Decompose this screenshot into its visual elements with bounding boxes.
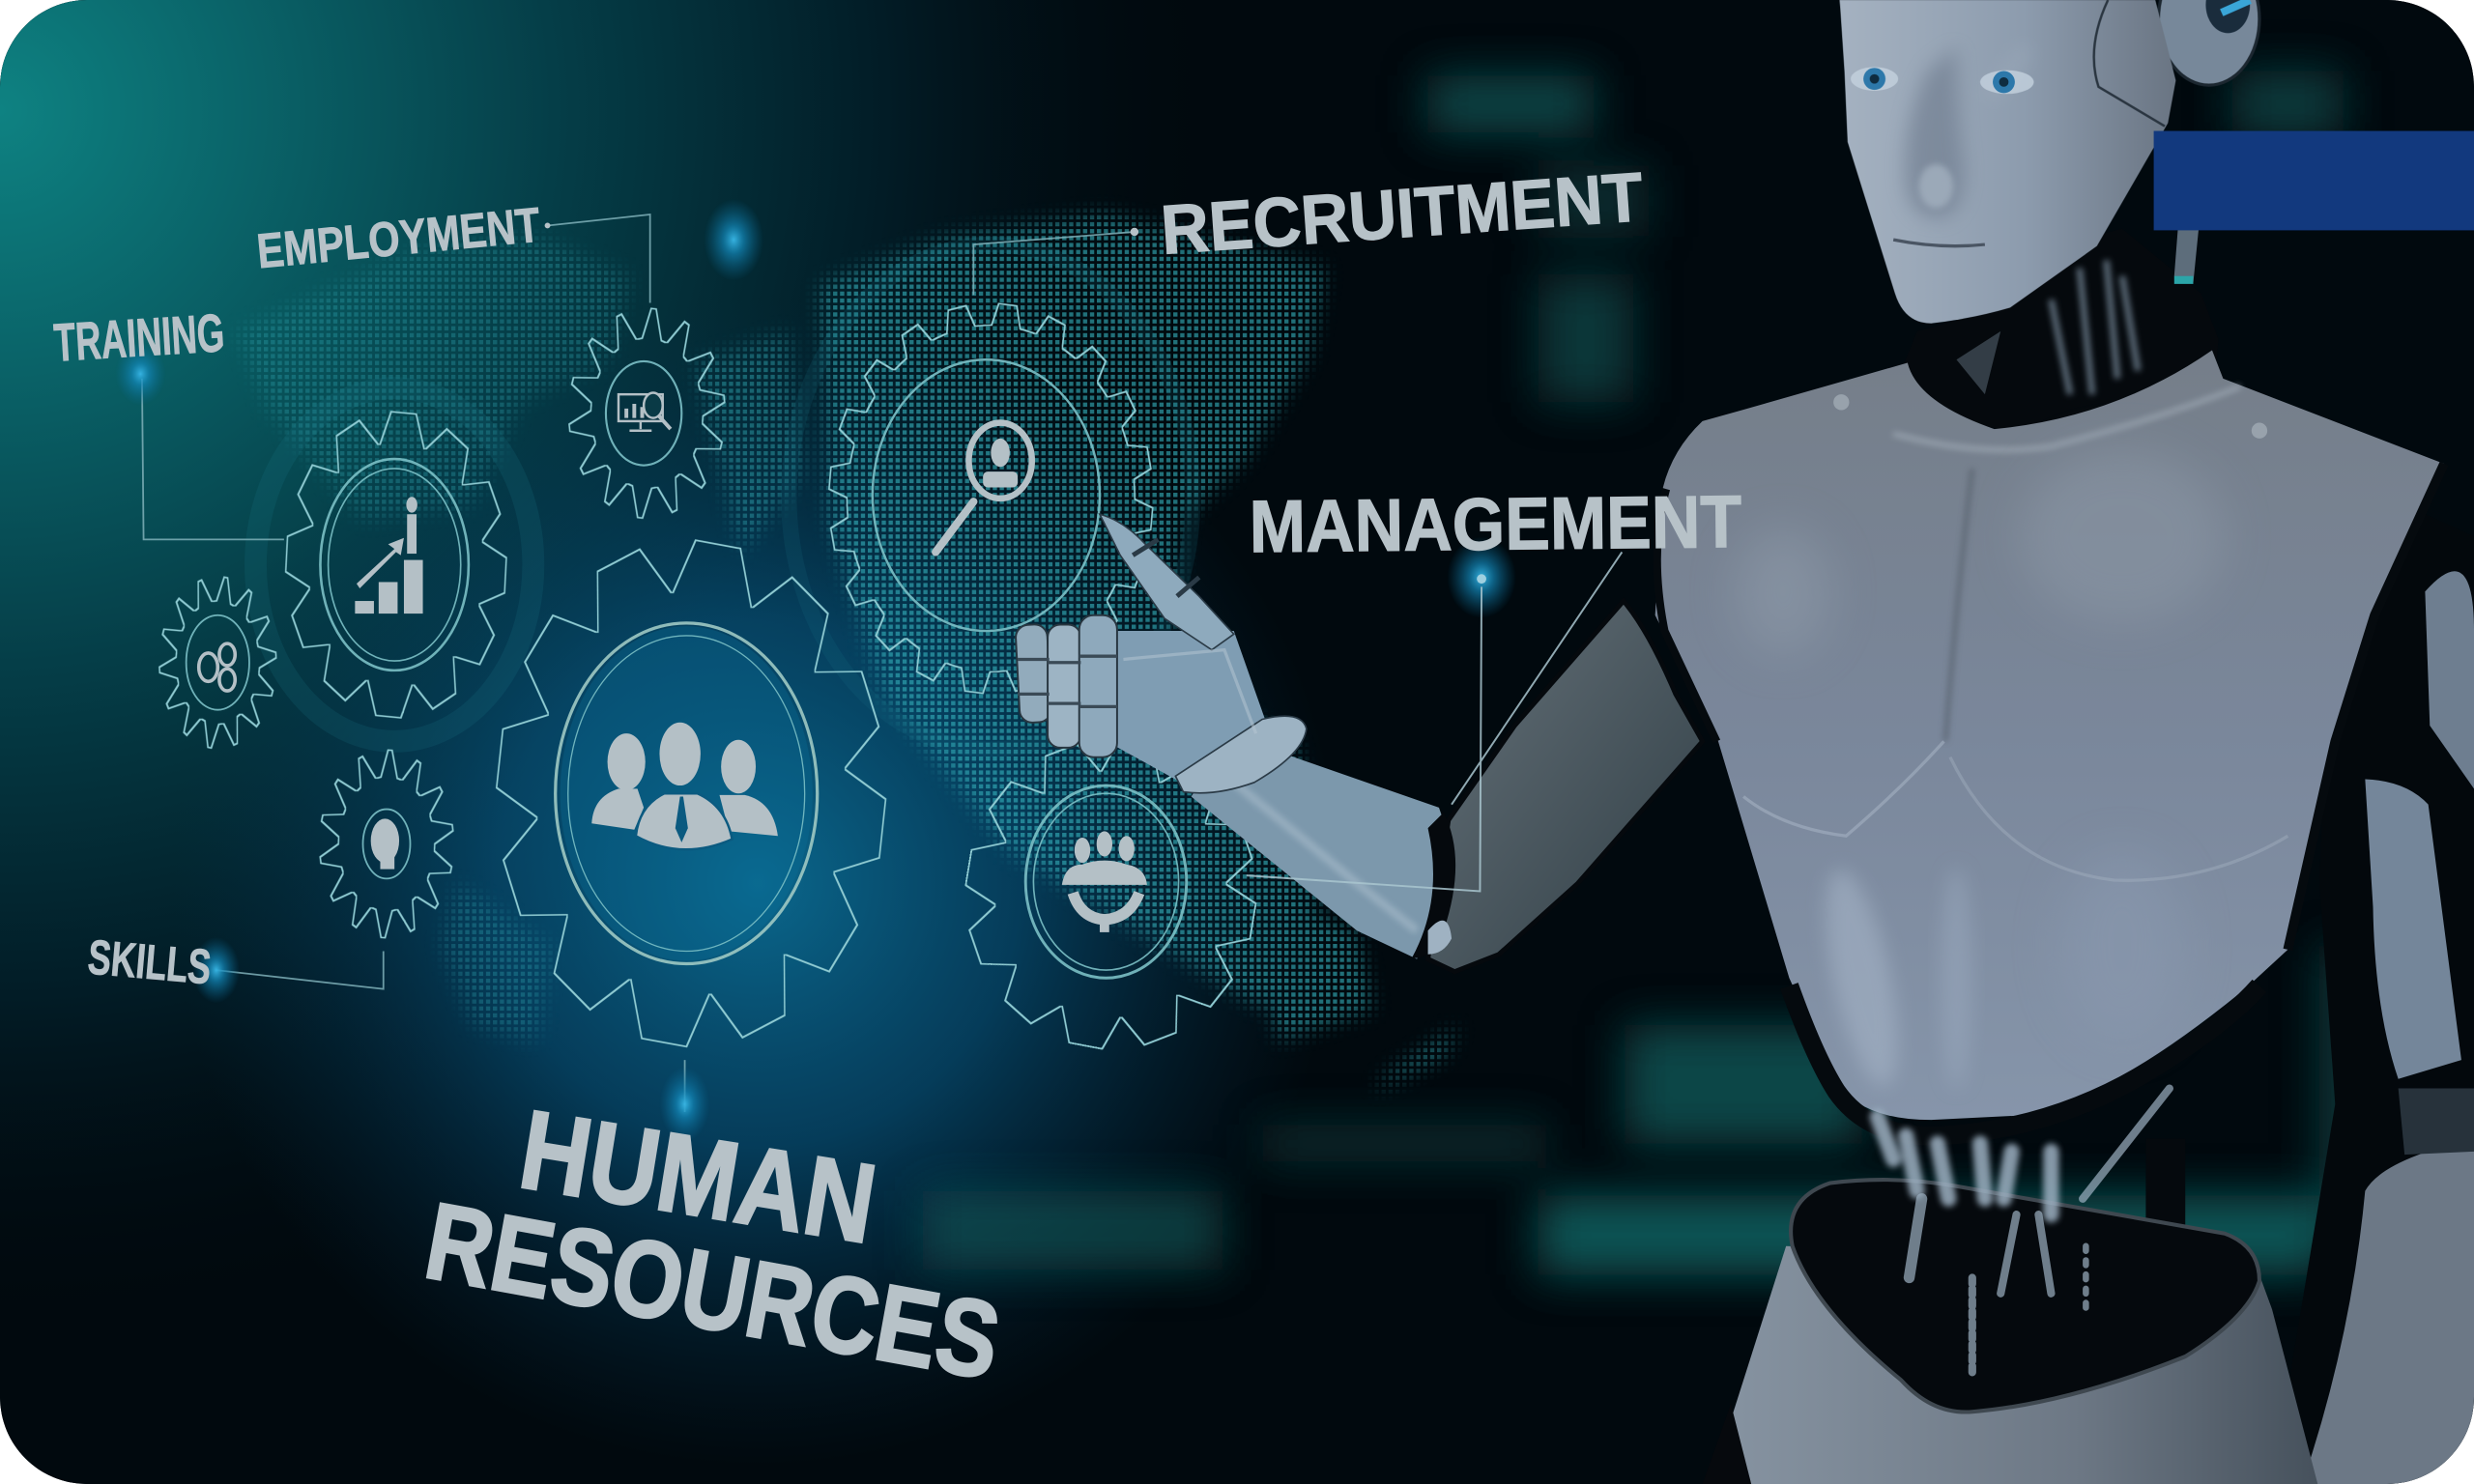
robot upper arm	[1428, 601, 1703, 972]
robot waist hardware	[1791, 1089, 2259, 1412]
connector lines	[142, 214, 1135, 1112]
robot torso black trim	[1657, 464, 2444, 1136]
robot neck	[1901, 134, 2219, 442]
gear inner rings	[187, 359, 1187, 978]
dotted world map	[237, 202, 1462, 1094]
robot forearm	[1192, 735, 1455, 959]
halo rings behind gears	[255, 244, 1193, 960]
icon: magnifier with person	[935, 423, 1032, 552]
icon: growth chart	[355, 497, 423, 614]
robot eyes and mouth	[1851, 67, 2033, 246]
connector: management	[1247, 552, 1622, 891]
icon: people	[591, 723, 778, 849]
glowing nodes	[115, 199, 1516, 1142]
robot hand	[1015, 514, 1307, 793]
robot hips	[1703, 1246, 2317, 1484]
heading: resources: RESOURCES	[417, 1179, 1009, 1403]
label: employment: EMPLOYMENT	[254, 197, 542, 279]
label: recruitment: RECRUITMENT	[1159, 158, 1646, 270]
icon: cogs	[199, 643, 235, 691]
label: management: MANAGEMENT	[1249, 481, 1742, 568]
icon: team with gear	[1062, 831, 1147, 932]
robot torso	[1655, 350, 2444, 1120]
robot head	[1840, 0, 2259, 324]
blue redaction block	[2154, 131, 2474, 230]
robot far arm	[2272, 473, 2474, 1484]
icon: monitor search	[618, 393, 671, 431]
label: skills: SKILLS	[86, 929, 214, 994]
heading: human: HUMAN	[512, 1086, 884, 1267]
gears	[151, 283, 1279, 1078]
label: training: TRAINING	[52, 302, 226, 373]
icon: head	[371, 818, 399, 870]
robot	[1015, 0, 2474, 1484]
